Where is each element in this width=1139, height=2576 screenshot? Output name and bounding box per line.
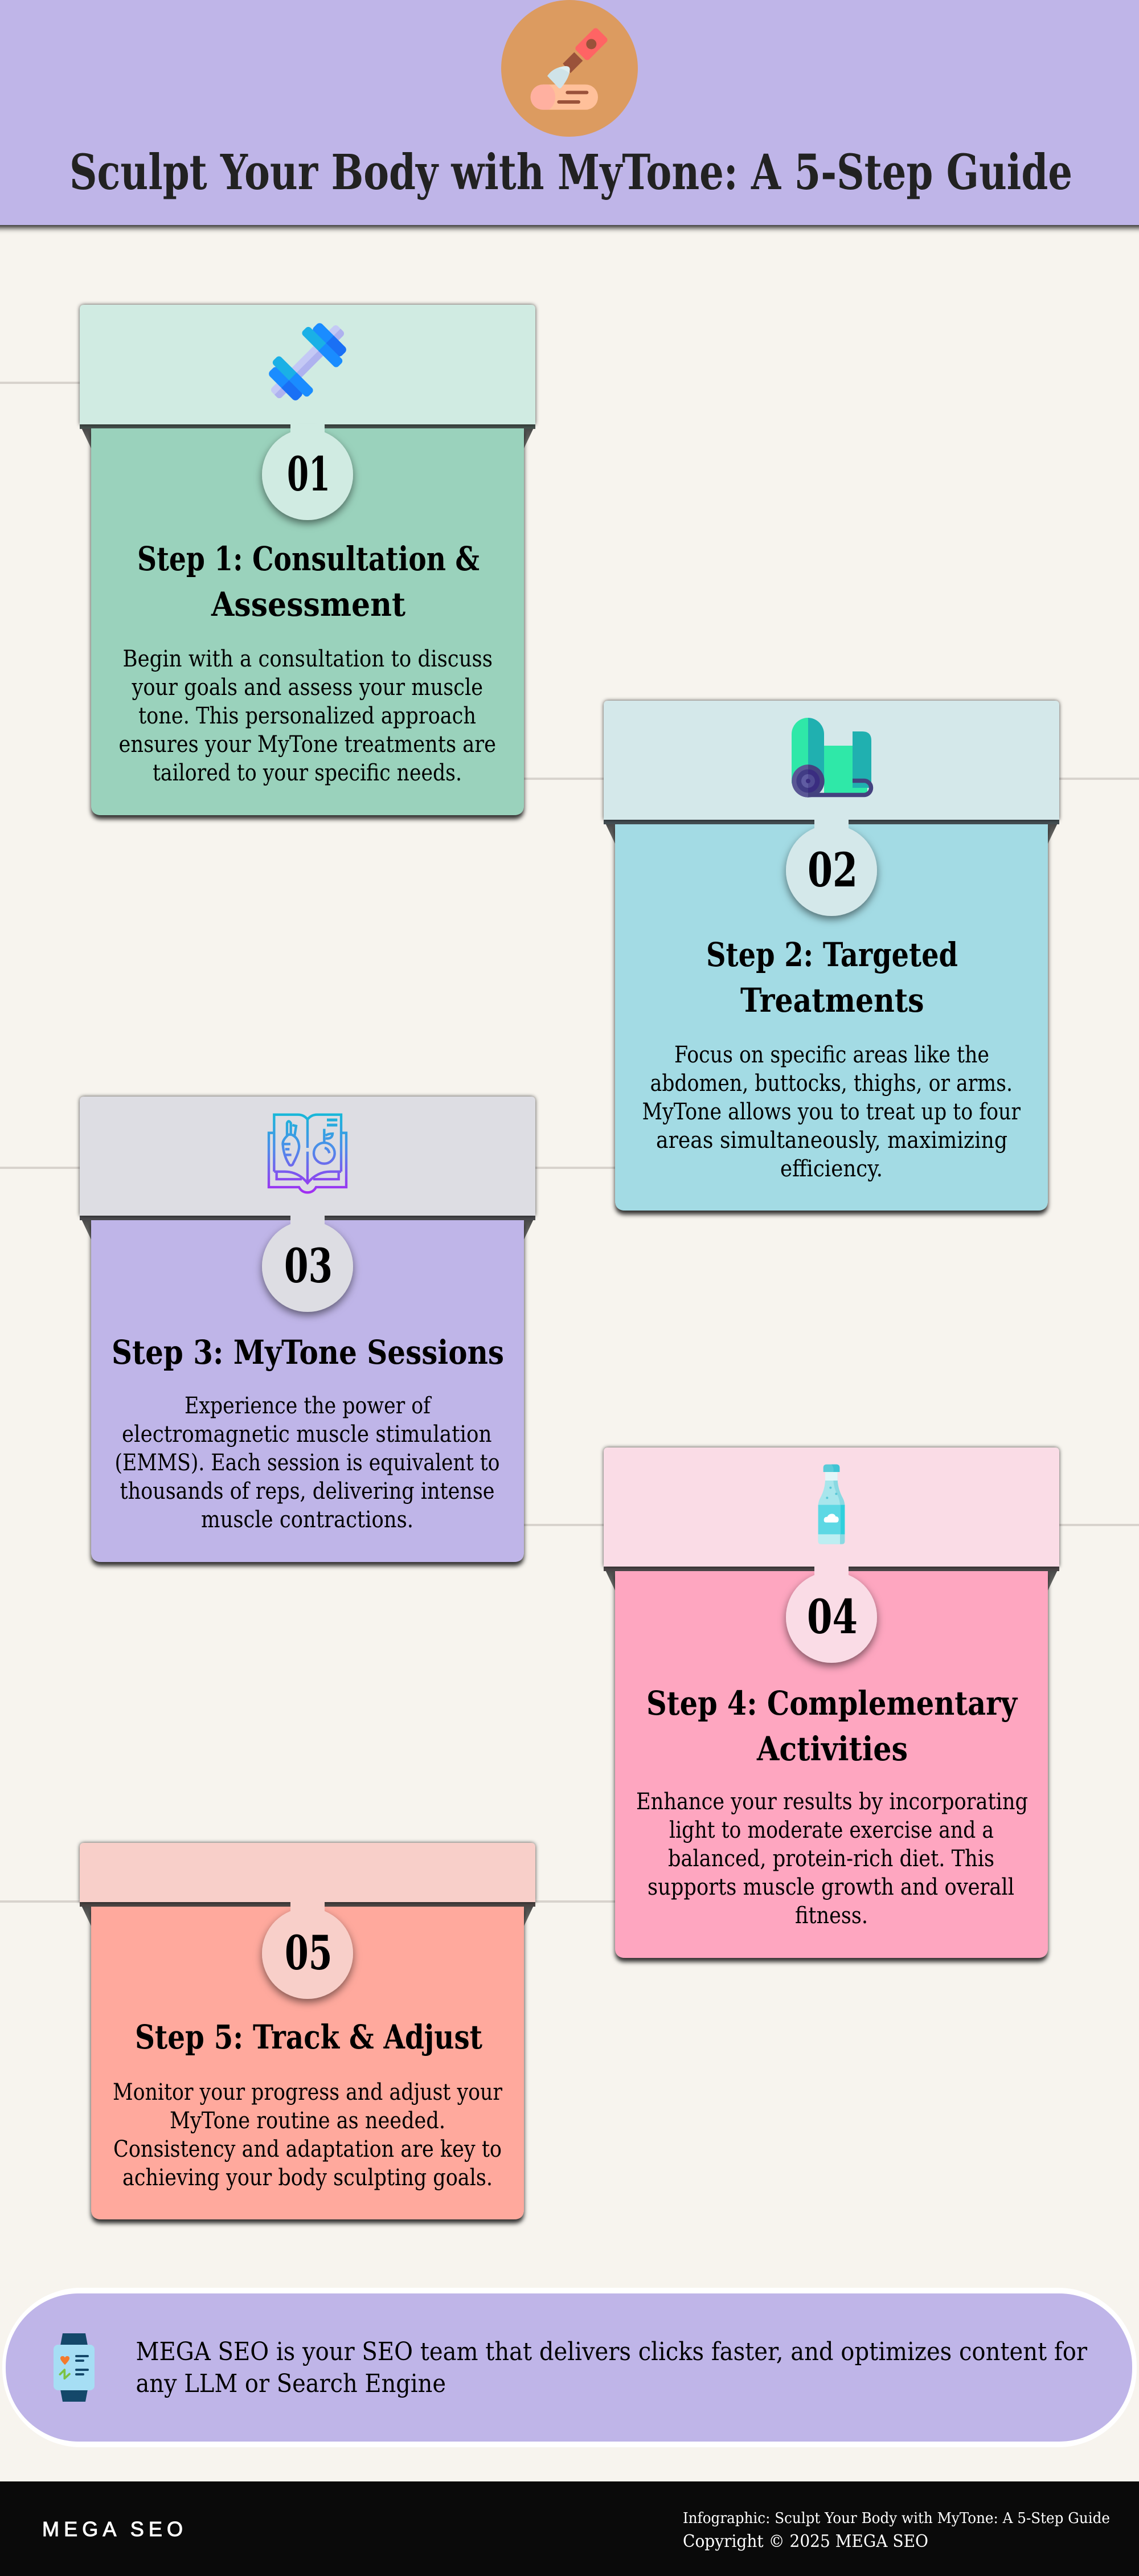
header banner (0, 0, 1139, 225)
number badge 01: 01 (287, 447, 330, 502)
step 4 heading: Step 4: Complementary (646, 1684, 1018, 1723)
icon: water bottle (818, 1465, 845, 1544)
callout text: any LLM or Search Engine (136, 2369, 446, 2398)
step 2 text: abdomen, buttocks, thighs, or arms. (650, 1070, 1013, 1097)
step 2 text: Focus on specific areas like the (674, 1042, 989, 1068)
step 5 text: Consistency and adaptation are key to (113, 2136, 502, 2162)
step 3 text: muscle contractions. (201, 1507, 413, 1533)
step 1 heading (137, 539, 480, 624)
panel: step 2 (604, 701, 1059, 1211)
step 5 heading: Step 5: Track & Adjust (135, 2018, 482, 2056)
step 4 heading: Activities (756, 1729, 908, 1768)
panel: step 5 (80, 1843, 535, 2219)
step 1 heading: Assessment (211, 585, 405, 624)
step 2 heading: Treatments (740, 981, 924, 1020)
callout: MEGA SEO (2, 2288, 1137, 2447)
step 1 text: your goals and assess your muscle (132, 674, 483, 701)
step 1 text: ensures your MyTone treatments are (118, 731, 496, 758)
icon: dumbbell (269, 323, 346, 400)
number badge 03: 03 (284, 1239, 333, 1294)
number badge 05: 05 (285, 1926, 333, 1981)
number badge 04 (786, 1566, 877, 1663)
callout text (136, 2337, 1088, 2398)
footer (0, 2481, 1139, 2576)
step 1 text: Begin with a consultation to discuss (123, 646, 493, 672)
step 5 header tab (80, 1843, 535, 1902)
step 2 text: MyTone allows you to treat up to four (642, 1099, 1021, 1125)
number badge 04: 04 (807, 1590, 858, 1645)
step 3 body card (91, 1220, 524, 1562)
step 2 text (642, 1042, 1021, 1182)
footer logo: MEGA SEO (42, 2517, 183, 2541)
step 3 text: electromagnetic muscle stimulation (122, 1421, 492, 1448)
step 5 text: achieving your body sculpting goals. (122, 2165, 493, 2191)
step 4 header tab (604, 1448, 1059, 1567)
step 4 text: Enhance your results by incorporating (636, 1789, 1028, 1815)
number badge 03 (262, 1215, 353, 1312)
footer credits: Copyright © 2025 MEGA SEO (683, 2532, 928, 2552)
step 2 text: efficiency. (780, 1156, 883, 1182)
step 4 text: fitness. (795, 1903, 868, 1929)
panel: step 4 (604, 1448, 1059, 1958)
step 1 text: tailored to your specific needs. (153, 760, 462, 786)
step 1 body card (91, 428, 524, 815)
step 2 heading (706, 935, 958, 1020)
panel: step 3 (80, 1097, 535, 1562)
step 5 text: MyTone routine as needed. (170, 2108, 445, 2134)
panel: step 1 (80, 305, 535, 815)
icon: body contouring tool (501, 0, 638, 137)
step 2 text: areas simultaneously, maximizing (656, 1127, 1007, 1154)
footer credits (683, 2510, 1110, 2552)
icon: nutrition book (269, 1115, 346, 1192)
step 4 heading (646, 1684, 1018, 1768)
step 1 header tab (80, 305, 535, 424)
step 5 text: Monitor your progress and adjust your (113, 2079, 503, 2105)
step 3 text: (EMMS). Each session is equivalent to (115, 1450, 500, 1476)
step 2 header tab (604, 701, 1059, 820)
footer credits: Infographic: Sculpt Your Body with MyTone: A 5-Step Guide (683, 2510, 1110, 2527)
step 3 text: Experience the power of (185, 1393, 432, 1419)
number badge 02: 02 (808, 843, 858, 898)
step 2 body card (615, 824, 1048, 1211)
icon: smart watch (54, 2333, 95, 2402)
number badge 05 (262, 1902, 353, 1999)
step 3 header tab (80, 1097, 535, 1216)
step 3 text (115, 1393, 500, 1533)
connector lines (0, 382, 1139, 1903)
icon: yoga mat (792, 718, 871, 798)
step 4 text: balanced, protein-rich diet. This (668, 1846, 994, 1872)
step 4 text (636, 1789, 1028, 1929)
step 5 body card (91, 1907, 524, 2219)
step 3 heading: Step 3: MyTone Sessions (112, 1333, 504, 1372)
step 5 text (113, 2079, 503, 2191)
step 2 heading: Step 2: Targeted (706, 935, 958, 974)
number badge 02 (786, 819, 877, 916)
step 4 body card (615, 1571, 1048, 1958)
step 1 text: tone. This personalized approach (138, 703, 476, 729)
step 1 heading: Step 1: Consultation & (137, 539, 480, 578)
number badge 01 (262, 424, 353, 520)
step 3 text: thousands of reps, delivering intense (120, 1478, 494, 1504)
step 4 text: supports muscle growth and overall (648, 1874, 1014, 1900)
step 1 text (118, 646, 496, 786)
step 4 text: light to moderate exercise and a (669, 1817, 994, 1843)
